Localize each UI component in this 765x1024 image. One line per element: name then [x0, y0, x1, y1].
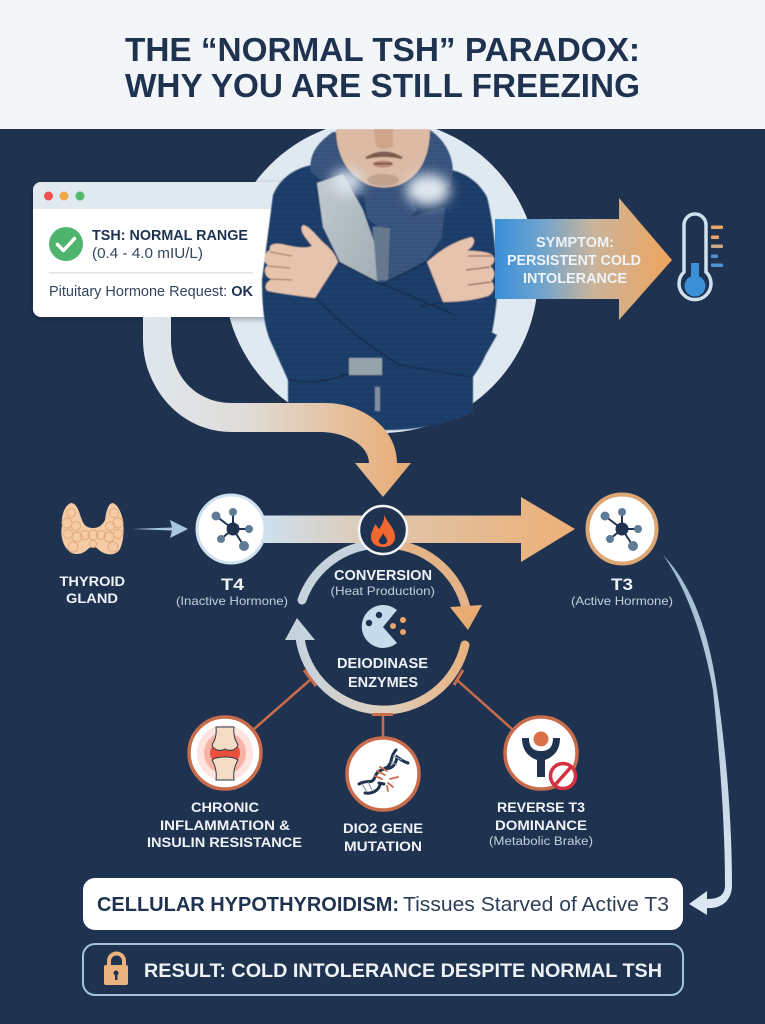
- left hand finger lines: [268, 252, 292, 280]
- right hand finger lines: [466, 256, 492, 285]
- thyroid label: GLAND: [66, 591, 118, 606]
- conversion label: [330, 568, 435, 598]
- sweater creases: [288, 262, 470, 382]
- inner shirt: [373, 227, 390, 280]
- conversion label: (Heat Production): [330, 584, 435, 598]
- T4 label: T4: [221, 575, 245, 594]
- grey scarf stripe: [317, 174, 378, 282]
- banner: result: RESULT: COLD INTOLERANCE DESPITE NORMAL TSH: [144, 960, 662, 982]
- arrow: T3 to cellular hypothyroidism: [663, 555, 732, 915]
- sweater body: [262, 165, 497, 430]
- arc: bottom: [300, 638, 465, 710]
- DIO2 label: DIO2 GENE: [343, 821, 423, 836]
- scarf end: [349, 358, 382, 375]
- arrow: symptom: [495, 198, 672, 320]
- deiodinase label: DEIODINASE: [337, 656, 428, 672]
- arrowhead: right: [450, 605, 482, 630]
- portrait backdrop circle: [224, 119, 538, 433]
- back forearm: [268, 262, 443, 381]
- deiodinase label: [337, 656, 428, 691]
- icon: padlock: [104, 954, 128, 985]
- T3 label: [571, 575, 673, 608]
- header band: [0, 0, 765, 129]
- title: WHY YOU ARE STILL FREEZING: [125, 67, 640, 104]
- T4 label: [176, 575, 288, 608]
- symptom label: SYMPTOM:: [536, 234, 614, 251]
- icon: enzyme pac-man: [362, 605, 406, 648]
- inhibitor connectors: [254, 670, 512, 738]
- icon: inflamed joint: [189, 717, 261, 789]
- chronic inflammation label: INSULIN RESISTANCE: [147, 835, 302, 850]
- chronic inflammation label: CHRONIC: [191, 800, 259, 815]
- T4 molecule: [197, 495, 265, 563]
- left hand: [264, 225, 338, 298]
- deiodinase label: ENZYMES: [348, 675, 418, 691]
- man in sweater hugging himself: [262, 129, 497, 430]
- chronic inflammation label: [147, 800, 302, 850]
- panel: TSH lab result card: [33, 182, 300, 317]
- arc: top left: [302, 545, 368, 600]
- symptom label: PERSISTENT COLD: [507, 252, 641, 269]
- reverse T3 label: [489, 800, 593, 848]
- banner: cellular hypothyroidism: [83, 878, 683, 930]
- panel: TSH lab result card: Pituitary Hormone Request: OK: [49, 284, 254, 300]
- title: [125, 31, 640, 104]
- T3 molecule: [588, 494, 656, 564]
- arc: top right: [398, 545, 466, 608]
- banner: cellular hypothyroidism: CELLULAR HYPOTHYROIDISM:: [97, 894, 399, 916]
- panel: TSH lab result card: (0.4 - 4.0 mIU/L): [92, 246, 203, 262]
- reverse T3 label: REVERSE T3: [497, 800, 586, 815]
- facial features: [366, 129, 402, 186]
- icon: flame in conversion node: [359, 506, 407, 554]
- symptom label: [507, 234, 641, 287]
- banner: result: [83, 944, 683, 995]
- front forearm: [315, 262, 497, 378]
- arrow: TSH card down to conversion: [143, 317, 411, 497]
- title: THE “NORMAL TSH” PARADOX:: [125, 31, 640, 68]
- chronic inflammation label: INFLAMMATION &: [160, 818, 290, 833]
- arrow: thyroid to T4: [132, 520, 188, 538]
- thyroid label: [60, 574, 125, 606]
- shirt placket: [375, 387, 380, 411]
- DIO2 label: MUTATION: [344, 839, 422, 854]
- scarf collar behind face: [310, 130, 453, 195]
- icon: thyroid gland: [61, 503, 124, 554]
- DIO2 label: [343, 821, 423, 854]
- thyroid label: THYROID: [60, 574, 125, 589]
- icon: thermometer: [679, 214, 723, 300]
- arrowhead: left: [285, 618, 315, 640]
- conversion label: CONVERSION: [334, 568, 432, 584]
- icon: broken DNA helix: [347, 738, 419, 810]
- panel: TSH lab result card: TSH: NORMAL RANGE: [92, 227, 248, 244]
- T3 label: T3: [611, 575, 633, 594]
- symptom label: INTOLERANCE: [523, 270, 627, 287]
- breath fog: [331, 169, 450, 206]
- T4 label: (Inactive Hormone): [176, 594, 288, 608]
- enzyme cycle ring: [285, 545, 482, 710]
- reverse T3 label: DOMINANCE: [495, 818, 587, 833]
- icon: reverse T3 blocked: [505, 717, 577, 789]
- banner: cellular hypothyroidism: Tissues Starved of Active T3: [403, 894, 669, 916]
- right hand: [427, 237, 494, 302]
- right scarf tail: [372, 207, 445, 282]
- main arrow: T4 to T3: [262, 497, 575, 562]
- T3 label: (Active Hormone): [571, 594, 673, 608]
- reverse T3 label: (Metabolic Brake): [489, 836, 593, 848]
- neck scarf: [363, 186, 417, 228]
- face: [336, 129, 430, 188]
